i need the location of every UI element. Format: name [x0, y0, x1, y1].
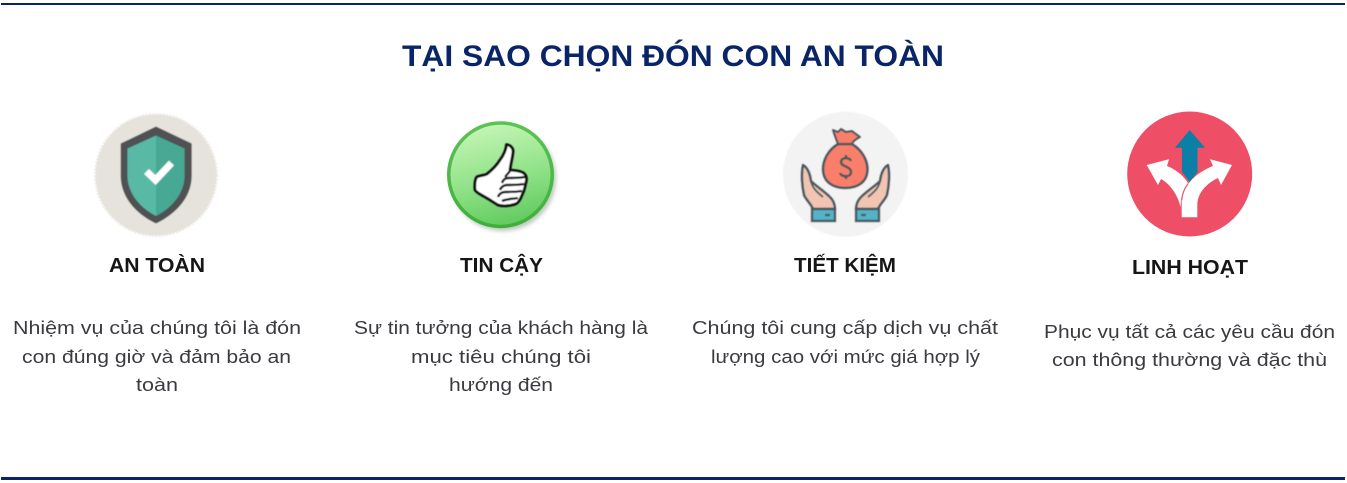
text: an toàn description: con đúng giờ và đảm bảo an — [22, 346, 291, 367]
text: tin cậy description: mục tiêu chúng tôi — [411, 346, 591, 367]
panel: linh hoạt — [1044, 112, 1335, 370]
heading: an toàn: AN TOÀN — [109, 254, 205, 277]
title: TẠI SAO CHỌN ĐÓN CON AN TOÀN — [402, 39, 944, 73]
text: linh hoạt description: con thông thường và đặc thù — [1052, 349, 1327, 370]
panel: tiết kiệm — [692, 112, 998, 367]
text: an toàn description: Nhiệm vụ của chúng tôi là đón — [13, 317, 301, 338]
text: tiết kiệm description — [692, 317, 998, 367]
heading: tiết kiệm: TIẾT KIỆM — [794, 253, 896, 277]
text: tin cậy description: Sự tin tưởng của khách hàng là — [354, 317, 649, 338]
panel: tin cậy — [354, 121, 649, 395]
icon: three-way arrows — [1127, 112, 1252, 236]
text: linh hoạt description: Phục vụ tất cả các yêu cầu đón — [1044, 321, 1335, 342]
text: an toàn description — [13, 317, 301, 395]
panel: an toàn — [13, 114, 301, 395]
text: tiết kiệm description: lượng cao với mức giá hợp lý — [711, 346, 981, 367]
heading: tin cậy: TIN CẬY — [460, 253, 544, 277]
icon: shield — [95, 114, 217, 236]
text: tiết kiệm description: Chúng tôi cung cấp dịch vụ chất — [692, 317, 998, 338]
text: tin cậy description — [354, 317, 649, 395]
icon: money bag and hands — [783, 112, 908, 237]
text: an toàn description: toàn — [136, 374, 178, 395]
text: linh hoạt description — [1044, 321, 1335, 370]
heading: linh hoạt: LINH HOẠT — [1132, 257, 1248, 279]
text: tin cậy description: hướng đến — [449, 374, 553, 395]
icon: thumbs up — [447, 121, 556, 231]
